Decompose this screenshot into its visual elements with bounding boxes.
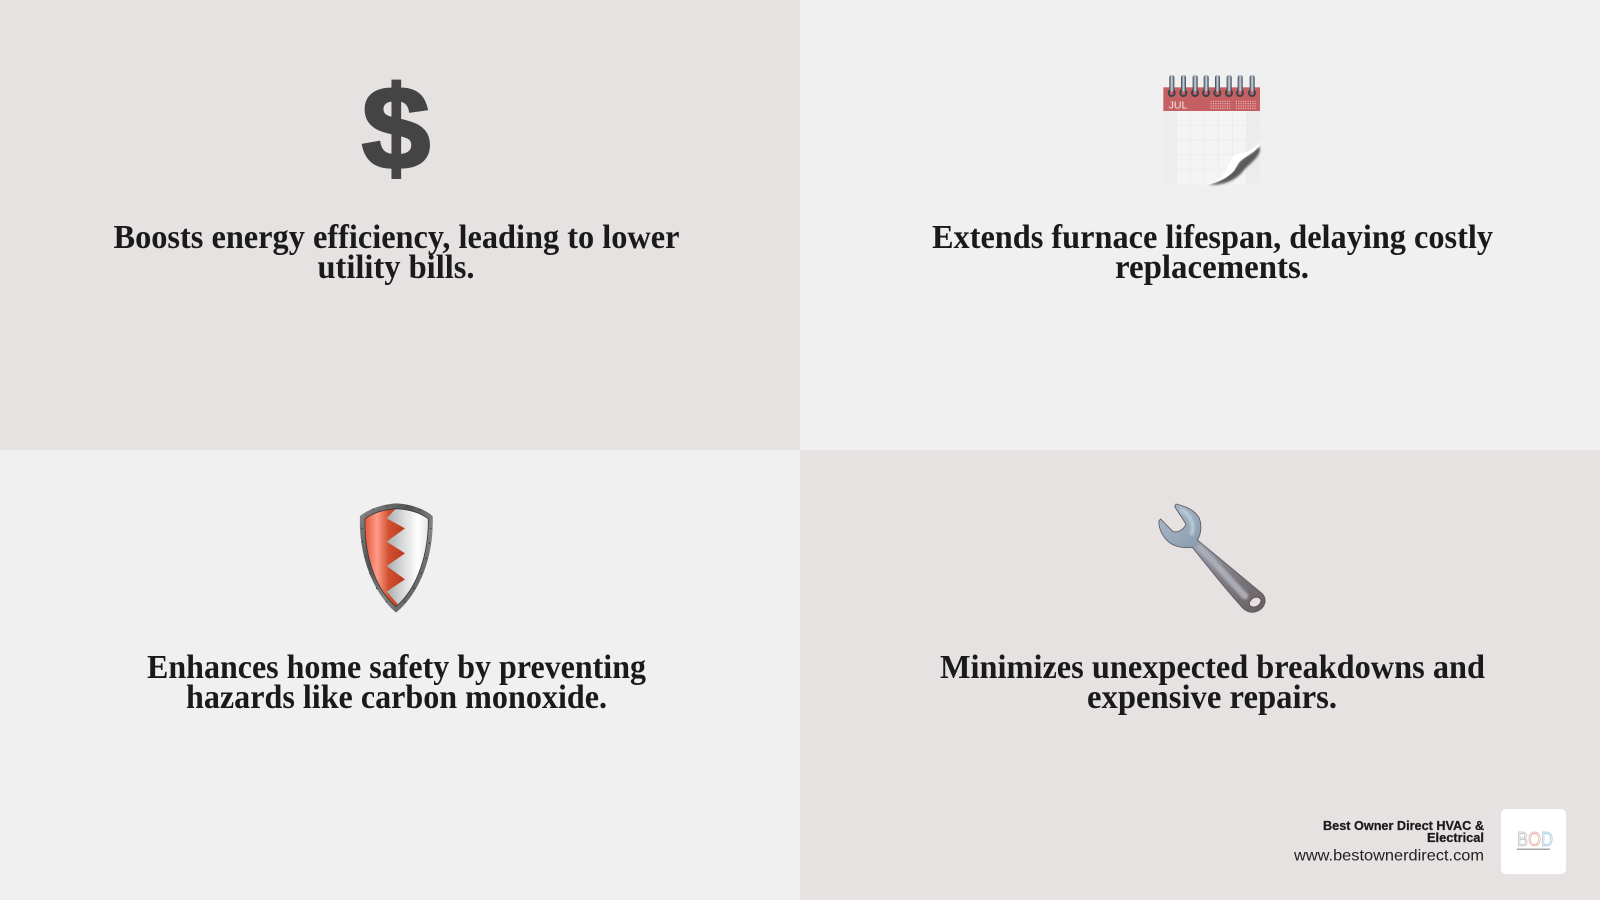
- heading: home safety: [147, 649, 646, 716]
- heading: energy efficiency: Boosts energy efficiency, leading to lower: [114, 219, 680, 256]
- logo tile: [1501, 809, 1566, 874]
- panel: energy efficiency: [0, 0, 800, 450]
- panel: furnace lifespan: [800, 0, 1600, 450]
- heading: furnace lifespan: [932, 219, 1493, 286]
- heading: home safety: hazards like carbon monoxide.: [186, 679, 607, 716]
- heading: fewer breakdowns: [940, 649, 1485, 716]
- heading: furnace lifespan: Extends furnace lifespan, delaying costly: [932, 219, 1493, 256]
- company name: Best Owner Direct HVAC &: [1323, 818, 1484, 833]
- company website: www.bestownerdirect.com: [1293, 848, 1484, 864]
- page curl: [1200, 142, 1260, 185]
- heading: fewer breakdowns: Minimizes unexpected breakdowns and: [940, 649, 1485, 686]
- logo tile: BOD: [1517, 829, 1553, 851]
- icon: calendar: [1163, 75, 1260, 185]
- panel: home safety: [148, 503, 646, 708]
- heading: home safety: Enhances home safety by preventing: [147, 649, 646, 686]
- icon: shield: [360, 503, 433, 613]
- heading: energy efficiency: [114, 219, 680, 286]
- icon: calendar: JUL: [1169, 101, 1188, 112]
- company credit: [1293, 809, 1566, 874]
- heading: furnace lifespan: replacements.: [1115, 249, 1309, 286]
- heading: energy efficiency: utility bills.: [318, 249, 474, 286]
- icon: dollar sign: $: [362, 62, 430, 194]
- heading: fewer breakdowns: expensive repairs.: [1087, 679, 1337, 716]
- company name: Electrical: [1427, 830, 1484, 845]
- company name: [1323, 818, 1484, 845]
- panel: fewer breakdowns: [800, 450, 1600, 900]
- icon: wrench: [1159, 504, 1265, 612]
